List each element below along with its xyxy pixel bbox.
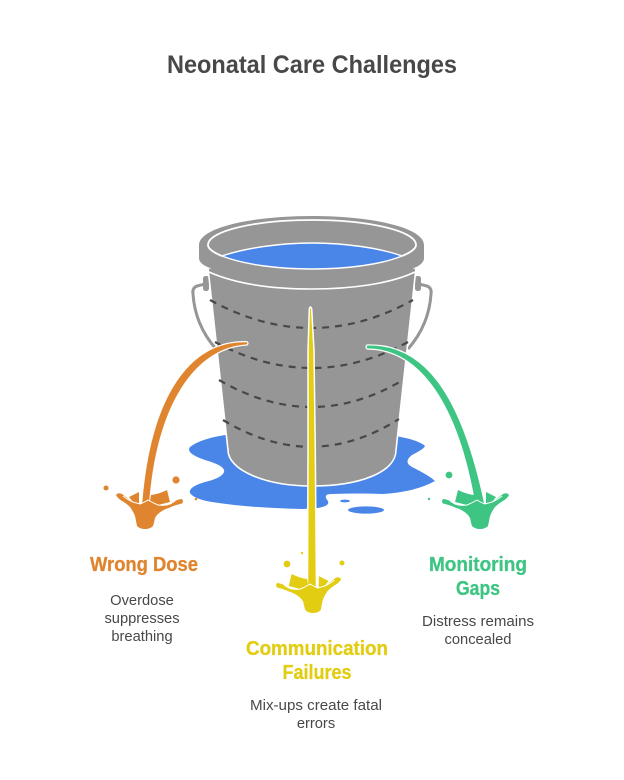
label: wrong dose — [90, 554, 198, 645]
stream: communication failures — [308, 307, 316, 590]
label: wrong dose: suppresses — [104, 611, 180, 627]
splash: monitoring gaps — [428, 472, 509, 529]
title: Neonatal Care Challenges — [167, 51, 457, 79]
label: wrong dose: Overdose — [110, 593, 174, 609]
label: wrong dose: breathing — [111, 629, 173, 645]
label: communication failures: errors — [297, 716, 335, 732]
splash: communication failures — [276, 552, 344, 613]
label: communication failures: Mix-ups create fatal — [250, 698, 382, 714]
bucket body — [208, 268, 416, 486]
label: monitoring gaps: Gaps — [456, 578, 500, 600]
stream: wrong dose — [142, 342, 248, 505]
label: monitoring gaps: Distress remains — [422, 614, 534, 630]
left handle — [193, 276, 216, 349]
label: communication failures: Communication — [246, 638, 388, 660]
label: monitoring gaps: Monitoring — [429, 554, 527, 576]
label: wrong dose: Wrong Dose — [90, 554, 198, 576]
splash: wrong dose — [104, 476, 197, 529]
bucket rim — [199, 216, 424, 289]
stream: monitoring gaps — [366, 345, 485, 505]
label: communication failures: Failures — [282, 662, 352, 684]
bucket opening ring — [208, 220, 416, 256]
bucket — [199, 216, 424, 486]
water surface — [222, 243, 402, 269]
label: communication failures — [246, 638, 388, 732]
label: monitoring gaps: concealed — [445, 632, 511, 648]
right handle — [408, 276, 431, 349]
label: monitoring gaps — [422, 554, 534, 648]
dashed seams — [210, 300, 413, 447]
puddle — [189, 435, 435, 514]
